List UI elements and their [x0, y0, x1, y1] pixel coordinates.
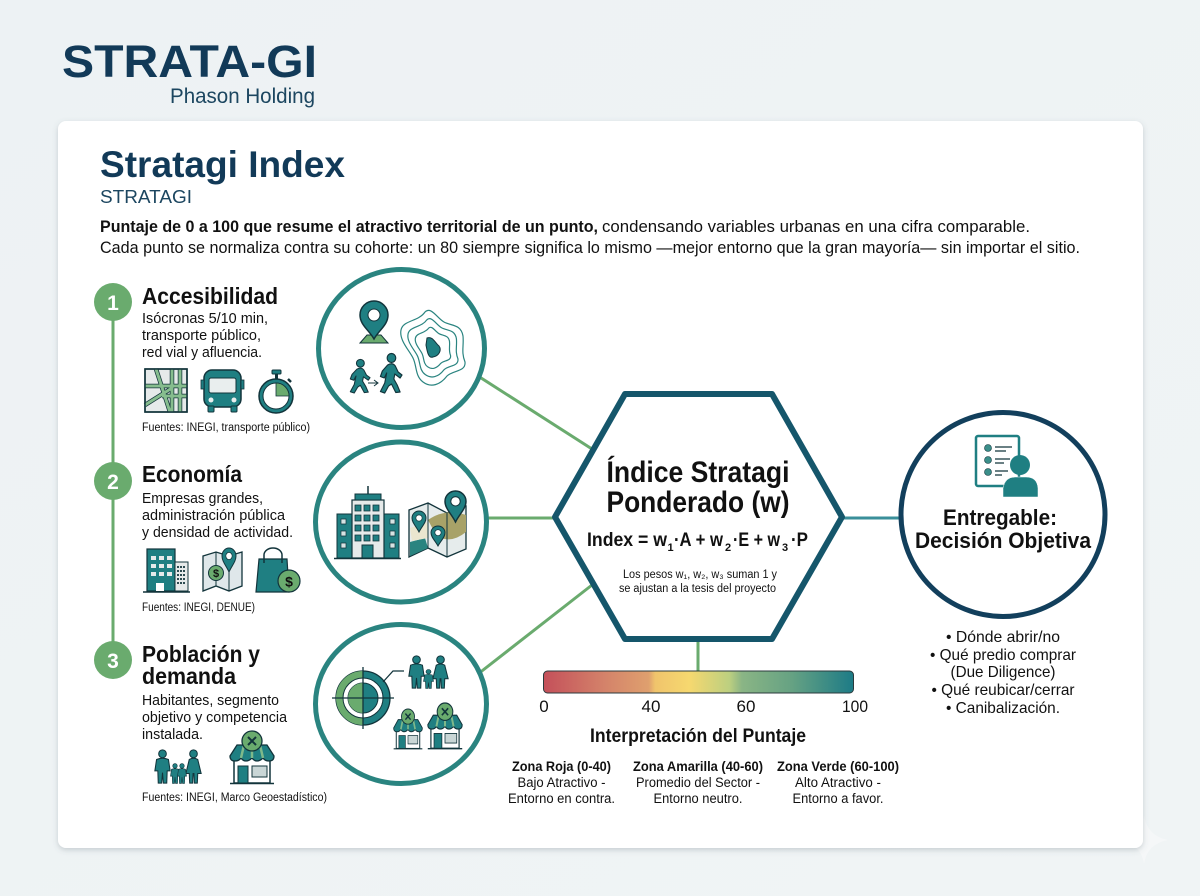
circle: accesibilidad illustration: [318, 270, 484, 428]
weights note: [619, 569, 777, 595]
panel: main card: [58, 121, 1143, 848]
icon: isochrones: [401, 310, 465, 385]
zone: yellow: Promedio del Sector -: [636, 775, 760, 790]
step 3: poblacion: [94, 641, 327, 804]
step 3 description: Habitantes, segmento: [142, 692, 279, 709]
step 3 description: objetivo y competencia: [142, 709, 288, 726]
step 3 sources: Fuentes: INEGI, Marco Geoestadístico): [142, 792, 327, 804]
icon: bus: [201, 370, 244, 412]
zone: green: Zona Verde (60-100): [777, 759, 899, 774]
step 1: accesibilidad: [94, 283, 310, 434]
icon: map with money pin: $: [213, 568, 219, 580]
number badge 2: 2: [107, 471, 119, 494]
formula: 1: [668, 542, 674, 554]
formula: [587, 530, 808, 554]
step 3 description: [142, 692, 288, 743]
scale labels: 60: [737, 697, 755, 716]
step 1 sources: Fuentes: INEGI, transporte público): [142, 422, 310, 434]
formula: 2: [725, 542, 731, 554]
icon: shopping bag: $: [285, 574, 293, 590]
step 3 heading: demanda: [142, 663, 236, 689]
icon: street map: [145, 369, 187, 412]
scale labels: [539, 697, 868, 716]
logo: STRATA-GI: [62, 36, 317, 87]
icon: family: [155, 750, 201, 783]
intro text: Puntaje de 0 a 100 que resume el atractivo territorial de un punto,: [100, 218, 598, 236]
hexagon title: Índice Stratagi: [606, 455, 790, 489]
zone: red: Entorno en contra.: [508, 791, 615, 806]
heading: STRATAGI: [100, 186, 192, 207]
hexagon title: Ponderado (w): [606, 486, 790, 519]
sparkle: [1120, 815, 1168, 864]
icon: checklist and person: [976, 436, 1038, 497]
icon: competitor stores: [394, 703, 462, 749]
zone: red: Bajo Atractivo -: [518, 775, 606, 790]
zone: red: Zona Roja (0-40): [512, 759, 611, 774]
step 1 description: Isócronas 5/10 min,: [142, 310, 268, 327]
hexagon title: [606, 455, 790, 519]
step 2 heading: Economía: [142, 461, 242, 487]
circle: poblacion illustration: [316, 624, 486, 784]
intro text: condensando variables urbanas en una cifra comparable.: [602, 218, 1030, 236]
zone: green: Alto Atractivo -: [795, 775, 881, 790]
deliverable list: • Canibalización.: [946, 700, 1060, 717]
icon: walkers: [350, 354, 402, 393]
formula: Index = w: [587, 530, 667, 551]
step 2: economia: [94, 461, 300, 614]
scale labels: 40: [642, 697, 660, 716]
formula: 3: [782, 542, 788, 554]
icon: building: [334, 486, 401, 558]
step 1 heading: Accesibilidad: [142, 283, 278, 309]
scale labels: 100: [842, 697, 868, 716]
weights note: se ajustan a la tesis del proyecto: [619, 583, 776, 595]
deliverable list: • Dónde abrir/no: [946, 629, 1060, 646]
hexagon: weighted index: [555, 394, 842, 639]
number badge 3: [94, 641, 132, 679]
number badge 3: 3: [107, 650, 119, 673]
intro text: Cada punto se normaliza contra su cohorte: un 80 siempre significa lo mismo —mejor entorno que la gran mayoría— sin importar el sitio.: [100, 239, 1080, 257]
step 3 heading: [142, 641, 260, 689]
circle: deliverable: [901, 412, 1105, 616]
number badge 1: 1: [107, 292, 119, 315]
zone: yellow: Entorno neutro.: [654, 791, 742, 806]
step 1 description: transporte público,: [142, 327, 261, 344]
icon: location pin: [360, 301, 388, 343]
connector to deliverable: [841, 516, 901, 520]
step 1 description: [142, 310, 268, 361]
weights note: Los pesos w₁, w₂, w₃ suman 1 y: [623, 569, 777, 581]
deliverable title: [915, 505, 1092, 553]
deliverable list: [930, 629, 1077, 717]
zone: yellow: Zona Amarilla (40-60): [633, 759, 763, 774]
step 2 description: [142, 490, 293, 541]
icon: stopwatch: [259, 370, 293, 413]
icon: shopping bag: [256, 548, 300, 592]
icon: folded map with pins: [409, 491, 466, 557]
heading: [100, 144, 345, 207]
zone: yellow: [633, 759, 763, 806]
intro text: [100, 218, 1080, 257]
step 2 sources: Fuentes: INEGI, DENUE): [142, 602, 255, 614]
icon: office buildings: [143, 549, 190, 592]
circle: economia illustration: [316, 442, 486, 602]
step 3 heading: Población y: [142, 641, 260, 667]
deliverable title: Decisión Objetiva: [915, 528, 1092, 553]
number badge 1: [94, 283, 132, 321]
icon: map with money pin: [203, 548, 242, 591]
heading: Stratagi Index: [100, 144, 345, 185]
number badge 2: [94, 462, 132, 500]
zone: red: [508, 759, 615, 806]
interpretation heading: Interpretación del Puntaje: [590, 726, 806, 747]
connectors to hexagon: [478, 376, 698, 674]
step 2 description: administración pública: [142, 507, 286, 524]
score scale bar: [544, 671, 854, 693]
deliverable title: Entregable:: [943, 505, 1057, 530]
zone: green: Entorno a favor.: [792, 791, 884, 806]
formula: ·E + w: [733, 530, 780, 551]
deliverable list: • Qué reubicar/cerrar: [932, 682, 1075, 699]
step 1 description: red vial y afluencia.: [142, 344, 262, 361]
logo: [62, 36, 317, 108]
icon: closed store: [230, 731, 274, 784]
step 2 description: Empresas grandes,: [142, 490, 263, 507]
timeline line: [112, 302, 114, 660]
formula: ·A + w: [674, 530, 723, 551]
step 2 description: y densidad de actividad.: [142, 524, 293, 541]
zone: green: [777, 759, 899, 806]
scale labels: 0: [539, 697, 549, 716]
deliverable list: • Qué predio comprar: [930, 647, 1077, 664]
step 3 description: instalada.: [142, 726, 203, 743]
logo: Phason Holding: [170, 85, 315, 108]
deliverable list: (Due Diligence): [950, 664, 1056, 681]
icon: family group: [409, 656, 448, 688]
formula: ·P: [791, 530, 808, 551]
icon: target: [332, 667, 404, 729]
